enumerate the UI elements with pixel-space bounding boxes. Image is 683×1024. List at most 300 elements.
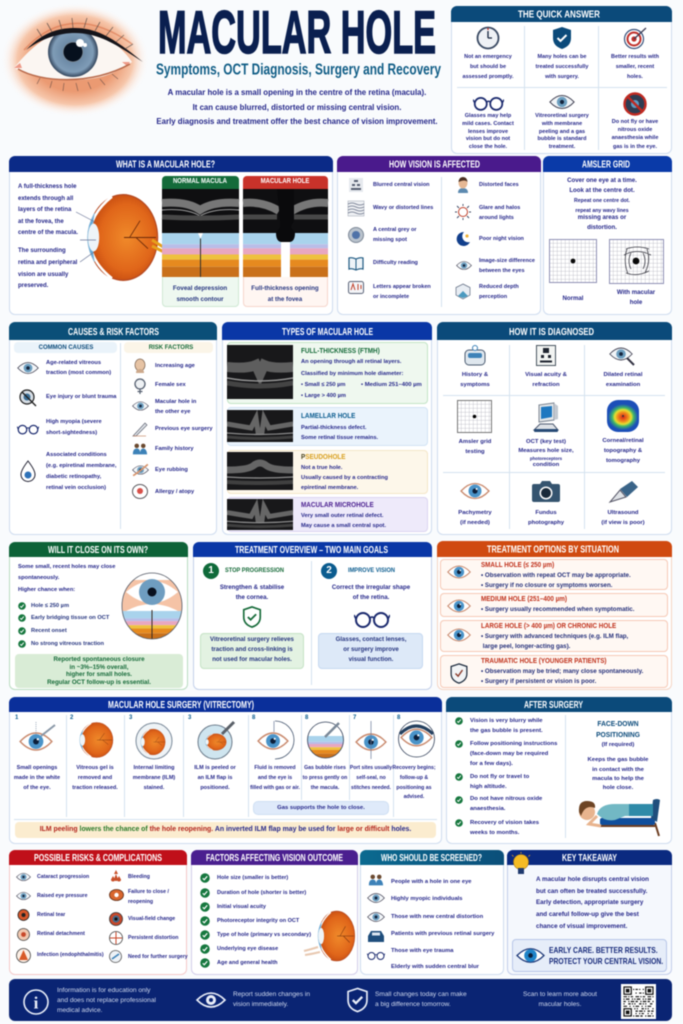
icon: tear drop bbox=[20, 460, 36, 482]
title: small hole: SMALL HOLE (≤ 250 µm) bbox=[481, 560, 554, 569]
text: step 4 bbox=[194, 764, 236, 794]
text: step 4: ILM is peeled or bbox=[194, 765, 236, 771]
text: glasses may help: Glasses may help bbox=[465, 113, 511, 119]
illustration: eye cross-section bbox=[76, 193, 163, 282]
text: do not fly: anaesthesia while bbox=[612, 135, 658, 141]
icon: distorted face bbox=[457, 176, 469, 194]
text: topography: tomography bbox=[606, 458, 640, 464]
text: pachymetry: Pachymetry bbox=[458, 510, 492, 516]
icon: light bulb bbox=[511, 852, 531, 878]
text: increasing age: Increasing age bbox=[155, 363, 195, 369]
text: stabilise: the cornea. bbox=[236, 594, 268, 601]
panel: after surgery bbox=[446, 697, 672, 844]
callout: ILM peeling note: ILM peeling lowers the chance of the hole reopening. An inverted ILM flap may be used for large or difficult holes. bbox=[40, 826, 411, 833]
text: recent onset: Recent onset bbox=[31, 628, 67, 634]
icon: check bbox=[455, 740, 463, 748]
image: OCT full-thickness bbox=[227, 345, 293, 399]
illustration: human eye bbox=[6, 7, 144, 113]
intro text: A macular hole is a small opening in the centre of the retina (macula). bbox=[168, 88, 426, 97]
icon: eye rubbing bbox=[132, 463, 149, 477]
illustration: eyeball bbox=[304, 909, 356, 965]
text: reduced depth: Reduced depth bbox=[479, 284, 519, 290]
text: nitrous oxide: Do not have nitrous oxide bbox=[470, 796, 542, 802]
text: image-size difference: between the eyes bbox=[479, 268, 525, 274]
card: traumatic hole bbox=[440, 655, 668, 688]
text: do not fly: gas is in the eye. bbox=[613, 144, 657, 150]
icon: glasses bbox=[17, 423, 39, 435]
text: irregular shape: Correct the irregular shape bbox=[332, 584, 410, 591]
text: OCT key test: OCT (key test) bbox=[526, 438, 566, 444]
text: retinal tear: Retinal tear bbox=[37, 912, 65, 918]
text: history: History & bbox=[462, 372, 488, 378]
text: full-thickness details: • Small ≤ 250 µm bbox=[301, 382, 345, 388]
text: full-thickness details bbox=[301, 357, 403, 402]
text: glasses may help bbox=[462, 112, 514, 150]
text: slogan: PROTECT YOUR CENTRAL VISION. bbox=[549, 956, 663, 966]
text: amsler instructions end: distortion. bbox=[587, 224, 617, 231]
label: normal macula: NORMAL MACULA bbox=[173, 178, 227, 185]
text: large hole details: large peel, longer-acting gas). bbox=[483, 643, 570, 650]
text: do not fly bbox=[611, 118, 659, 150]
text: blurred central vision: Blurred central vision bbox=[373, 182, 430, 188]
icon: family bbox=[132, 442, 148, 455]
icon: further surgery bbox=[109, 950, 122, 963]
text: initial acuity: Initial visual acuity bbox=[217, 904, 266, 910]
text: previous eye surgery: Previous eye surgery bbox=[155, 426, 213, 432]
text: treated successfully: with surgery. bbox=[545, 74, 579, 80]
text: recovery: weeks to months. bbox=[470, 830, 519, 836]
text: step 1: Small openings bbox=[17, 765, 57, 771]
text: photoreceptor condition: condition bbox=[533, 462, 559, 468]
text: glare and halos: Glare and halos bbox=[479, 205, 520, 211]
text: assess promptly: assessed promptly. bbox=[463, 74, 513, 80]
icon: moon bbox=[456, 231, 470, 247]
panel: causes and risk factors bbox=[9, 322, 217, 535]
image: OCT microhole bbox=[227, 499, 293, 530]
text: associated conditions bbox=[46, 450, 116, 494]
text: do not fly bbox=[470, 772, 529, 792]
badge: number 1: 1 bbox=[208, 565, 214, 576]
text: full-thickness details: • Large > 400 µm bbox=[301, 393, 346, 399]
icon: persistent distortion bbox=[109, 931, 123, 945]
step 1: 1 bbox=[15, 715, 18, 721]
icon: check bbox=[455, 819, 463, 827]
icon: eye chart bbox=[536, 345, 556, 366]
icon: check bbox=[18, 614, 26, 622]
title: lamellar: LAMELLAR HOLE bbox=[301, 411, 355, 420]
text: step 6: the macula. bbox=[311, 785, 339, 791]
icon: eye bbox=[447, 627, 471, 643]
heading: TYPES OF MACULAR HOLE bbox=[282, 327, 373, 338]
title: large hole: LARGE HOLE (> 400 µm) OR CHRONIC HOLE bbox=[481, 621, 616, 630]
icon: shield with check bbox=[449, 663, 469, 684]
text: step 7: self-seal, no bbox=[356, 775, 386, 781]
label: with macular hole: With macular bbox=[617, 289, 655, 296]
intro text: Early diagnosis and treatment offer the best chance of vision improvement. bbox=[156, 117, 438, 126]
text: step 6: to press gently on bbox=[303, 775, 347, 781]
text: keeps the bubble: Keeps the gas bubble bbox=[588, 757, 648, 763]
text: medium size: • Medium 251–400 µm bbox=[361, 382, 422, 388]
text: step 5: Fluid is removed bbox=[254, 765, 296, 771]
text: stabilise bbox=[220, 583, 284, 603]
text: surrounding retina bbox=[18, 246, 78, 290]
icon: step 8 recovery bbox=[398, 720, 435, 758]
chart: distorted amsler grid bbox=[608, 238, 665, 285]
text: amsler instructions: Cover one eye at a time. bbox=[567, 177, 637, 184]
text: fundus photography bbox=[528, 508, 564, 528]
heading bbox=[437, 541, 672, 557]
text: step 5 bbox=[250, 764, 300, 794]
icon: step 1 eye bbox=[18, 722, 60, 754]
heading bbox=[222, 322, 432, 340]
text: vitreoretinal surgery: with membrane bbox=[542, 121, 582, 127]
text: eye injury: Eye injury or blunt trauma bbox=[46, 394, 116, 400]
caption: full-thickness opening: Full-thickness opening bbox=[251, 284, 319, 292]
heading bbox=[507, 850, 672, 865]
text: lamellar details: Some retinal tissue remains. bbox=[301, 435, 378, 441]
text: image-size difference: Image-size difference bbox=[479, 258, 535, 264]
text: central grey spot: A central grey or bbox=[373, 227, 417, 233]
text: full-thickness definition: extends through all bbox=[18, 196, 73, 202]
text: step 8: follow-up & bbox=[400, 775, 428, 781]
text: positioning: for a few days). bbox=[470, 761, 513, 767]
icon: infection bbox=[16, 948, 31, 963]
panel: will it close on its own: higher for small holes. bbox=[66, 671, 132, 678]
chart: normal amsler grid bbox=[548, 238, 598, 284]
panel: treatment overview: Glasses, contact lenses, bbox=[336, 636, 406, 643]
icon: increasing age bbox=[134, 359, 146, 373]
icon: green shield bbox=[242, 606, 262, 628]
heading bbox=[9, 156, 333, 172]
text: ultrasound: (if view is poor) bbox=[601, 520, 645, 526]
footer band bbox=[9, 979, 672, 1021]
panel: factors affecting vision outcome bbox=[191, 850, 358, 975]
card: lamellar bbox=[227, 407, 428, 446]
title: pseudohole: PSEUDOHOLE bbox=[301, 452, 346, 461]
text: new distortion: Those with new central distortion bbox=[391, 914, 483, 920]
text: takeaway: chance of visual improvement. bbox=[536, 923, 627, 930]
text: vitreoretinal surgery: Vitreoretinal surgery bbox=[535, 113, 589, 119]
text: irregular shape bbox=[332, 583, 410, 603]
text: hole type: Type of hole (primary vs secondary) bbox=[217, 932, 311, 938]
icon: examined eye bbox=[548, 94, 576, 110]
text: lamellar details bbox=[301, 423, 378, 443]
icon: visual-field change bbox=[109, 912, 123, 926]
icon: step 4 peel bbox=[198, 720, 238, 760]
text: hole in other eye: the other eye bbox=[155, 409, 190, 415]
text: do not fly: high altitude. bbox=[470, 784, 507, 790]
text: takeaway: but can often be treated successfully. bbox=[536, 888, 647, 895]
text: nitrous oxide bbox=[470, 794, 542, 814]
text: dilated exam: Dilated retinal bbox=[604, 372, 642, 378]
text: scan: macular holes. bbox=[539, 1001, 581, 1008]
text: education: medical advice. bbox=[57, 1007, 102, 1014]
icon: myopic eye bbox=[367, 892, 385, 904]
badge: number 1 bbox=[203, 563, 219, 579]
text: step 1 bbox=[14, 764, 60, 794]
intro text: It can cause blurred, distorted or missing central vision. bbox=[193, 102, 401, 112]
text: microhole details: Very small outer retinal defect. bbox=[301, 513, 384, 519]
text: scan bbox=[523, 990, 597, 1010]
icon: depth cube bbox=[454, 283, 472, 300]
callout: early care bbox=[512, 939, 667, 972]
text: microhole details: May cause a small central spot. bbox=[301, 523, 386, 529]
icon: eye bbox=[447, 564, 471, 580]
icon: check bbox=[200, 930, 210, 940]
icon: failure to close bbox=[109, 889, 124, 901]
icon: image-size eye bbox=[456, 260, 472, 270]
icon: female sign bbox=[134, 378, 146, 394]
text: sudden blur: Elderly with sudden central blur bbox=[391, 964, 479, 970]
text: image-size difference bbox=[478, 257, 536, 274]
text: high myopia: High myopia (severe bbox=[46, 418, 102, 424]
text: full-thickness definition: centre of the macula. bbox=[18, 230, 78, 236]
text: fundus photography: Fundus bbox=[535, 510, 557, 516]
text: ultrasound: Ultrasound bbox=[607, 510, 639, 516]
text: intro bbox=[18, 562, 115, 584]
text: hole size: Hole size (smaller is better) bbox=[217, 875, 288, 881]
panel: treatment overview bbox=[193, 542, 432, 690]
panel: treatment options by situation bbox=[437, 541, 672, 690]
text: amsler test: Amsler grid bbox=[459, 439, 491, 445]
text: large hole details bbox=[481, 632, 628, 652]
text: step 6 bbox=[303, 764, 347, 794]
heading bbox=[9, 850, 187, 865]
text: visual-field change: Visual-field change bbox=[128, 916, 175, 922]
text: slogan: EARLY CARE. BETTER RESULTS. bbox=[549, 946, 658, 954]
text: takeaway: A macular hole disrupts central vision bbox=[536, 876, 649, 883]
label: with macular hole bbox=[616, 288, 656, 306]
heading: face-down positioning bbox=[596, 718, 640, 740]
text: microhole details bbox=[301, 511, 386, 531]
text: takeaway bbox=[536, 874, 649, 932]
heading: THE QUICK ANSWER bbox=[518, 10, 601, 20]
text: amsler instructions: Repeat one centre dot. bbox=[574, 198, 630, 204]
step 8: 8 bbox=[397, 715, 400, 721]
text: duration: Duration of hole (shorter is better) bbox=[217, 890, 306, 896]
title: stop progression: STOP PROGRESSION bbox=[225, 567, 284, 574]
text: report changes: Report sudden changes in bbox=[233, 991, 310, 998]
text: stabilise: Strengthen & stabilise bbox=[220, 584, 284, 591]
text: keeps the bubble bbox=[588, 756, 648, 793]
text: positioning: Follow positioning instructions bbox=[470, 741, 557, 747]
text: photoreceptor condition: photoreceptors bbox=[530, 456, 562, 461]
text: step 2: Vitreous gel is bbox=[76, 765, 114, 771]
text: pseudohole details: Not a true hole. bbox=[301, 465, 342, 471]
text: associated conditions: retinal vein occlusion) bbox=[46, 484, 106, 490]
text: full-thickness definition: at the fovea, the bbox=[18, 219, 64, 225]
text: pseudohole details: Usually caused by a contracting bbox=[301, 475, 388, 481]
text: do not fly: nitrous oxide bbox=[618, 127, 652, 133]
text: surrounding retina: retina and peripheral bbox=[18, 260, 77, 266]
text: takeaway: and careful follow-up give the best bbox=[536, 911, 639, 918]
illustration: eye over retina layers bbox=[120, 572, 184, 640]
text: amsler instructions bbox=[566, 176, 637, 214]
icon: bleeding bbox=[110, 870, 122, 883]
text: letters broken: Letters appear broken bbox=[373, 284, 431, 290]
icon: retinal tear bbox=[16, 909, 31, 921]
heading: WILL IT CLOSE ON ITS OWN? bbox=[48, 545, 148, 556]
text: full-thickness details: Classified by minimum hole diameter: bbox=[301, 371, 403, 377]
step 3: 3 bbox=[129, 715, 132, 721]
icon: broken glasses bbox=[367, 949, 385, 962]
text: vitreoretinal surgery bbox=[534, 112, 590, 150]
illustration: face-down person bbox=[575, 798, 663, 838]
badge: number 2 bbox=[321, 563, 337, 579]
text: report changes: vision immediately. bbox=[233, 1001, 288, 1008]
caption: foveal depression bbox=[172, 284, 228, 302]
text: step 2: removed and bbox=[78, 775, 112, 781]
step 6: 8 bbox=[305, 715, 308, 721]
text: higher chance: Higher chance when: bbox=[18, 587, 75, 593]
text: step 5: filled with gas or air. bbox=[250, 785, 300, 791]
heading bbox=[191, 850, 358, 865]
heading: face-down positioning: FACE-DOWN bbox=[597, 718, 639, 728]
text: small hole details: • Surgery if no closure or symptoms worsen. bbox=[481, 582, 612, 589]
text: surrounding retina: vision are usually bbox=[18, 272, 68, 278]
heading bbox=[9, 322, 217, 340]
heading: TREATMENT OPTIONS BY SITUATION bbox=[487, 544, 619, 556]
intro text bbox=[156, 88, 438, 126]
text: amsler instructions end bbox=[577, 214, 627, 231]
text: assess promptly: but should be bbox=[470, 64, 506, 70]
text: further surgery: Need for further surgery bbox=[128, 954, 188, 960]
panel: how it is diagnosed bbox=[437, 322, 672, 535]
card: pseudohole bbox=[227, 450, 428, 494]
text: amsler test: testing bbox=[465, 449, 485, 455]
text: traumatic hole details: • Observation may be tried; many close spontaneously. bbox=[481, 668, 643, 675]
heading: AFTER SURGERY bbox=[524, 700, 583, 711]
chart: topography map bbox=[607, 400, 639, 432]
text: allergy: Allergy / atopy bbox=[155, 489, 194, 495]
text: myopic: Highly myopic individuals bbox=[391, 896, 463, 902]
text: lamellar details: Partial-thickness defect. bbox=[301, 425, 366, 431]
icon: glasses bbox=[354, 610, 390, 628]
text: glasses may help: close the hole. bbox=[469, 144, 507, 150]
icon: info: i bbox=[34, 994, 39, 1012]
heading bbox=[9, 542, 188, 557]
heading: common causes bbox=[14, 342, 117, 353]
label: macular hole: MACULAR HOLE bbox=[261, 178, 309, 185]
text: cataract: Cataract progression bbox=[37, 874, 89, 880]
text: treated successfully: Many holes can be bbox=[538, 54, 586, 60]
callout: vitreoretinal surgery bbox=[200, 633, 304, 669]
icon: dilated exam bbox=[609, 346, 635, 366]
icon: check bbox=[455, 796, 463, 804]
card: normal macula bbox=[162, 176, 239, 307]
icon: eye bbox=[196, 991, 226, 1009]
badge: number 2: 2 bbox=[326, 565, 332, 576]
text: pachymetry: (if needed) bbox=[460, 520, 490, 526]
text: step 3: membrane (ILM) bbox=[133, 775, 175, 781]
caption: full-thickness opening: at the fovea bbox=[268, 296, 302, 302]
text: vitreous traction bbox=[46, 358, 111, 379]
callout: ILM peeling note bbox=[15, 822, 436, 838]
icon: check bbox=[200, 873, 210, 883]
text: difficulty reading: Difficulty reading bbox=[373, 260, 418, 266]
icon: step 7 eye bbox=[354, 721, 388, 759]
text: full-thickness definition bbox=[18, 182, 78, 236]
text: recovery: Recovery of vision takes bbox=[470, 820, 539, 826]
text: reduced depth bbox=[478, 283, 520, 300]
callout: glasses and lenses bbox=[318, 633, 423, 669]
text: hole in other eye bbox=[155, 397, 196, 417]
heading bbox=[360, 850, 504, 865]
text: traumatic hole details: • Surgery if persistent or vision is poor. bbox=[481, 678, 596, 685]
text: vitreous traction: Age-related vitreous bbox=[46, 360, 101, 366]
panel: treatment overview: visual function. bbox=[349, 656, 393, 663]
text: photoreceptor condition bbox=[530, 456, 562, 469]
text: infection: Infection (endophthalmitis) bbox=[37, 952, 104, 958]
title: full-thickness: FULL-THICKNESS (FTMH) bbox=[301, 346, 380, 355]
icon: eye bbox=[447, 598, 471, 614]
icon: info bbox=[23, 989, 49, 1015]
icon: step 6 gas bubble bbox=[306, 720, 345, 760]
card: full-thickness bbox=[227, 342, 428, 404]
text: small hole details bbox=[481, 571, 631, 590]
text: education: Information is for education only bbox=[57, 987, 150, 994]
text: step 8: positioning as bbox=[396, 785, 432, 791]
heading bbox=[437, 322, 672, 340]
text: full-thickness definition: layers of the retina bbox=[18, 207, 71, 213]
text: vitreoretinal surgery: bubble is standard bbox=[538, 136, 586, 142]
text: do not fly: Do not fly or have bbox=[612, 119, 658, 125]
heading bbox=[9, 697, 442, 712]
heading bbox=[543, 156, 672, 172]
text: glasses may help: lenses improve bbox=[468, 129, 508, 135]
step 4: 3 bbox=[188, 715, 191, 721]
text: associated conditions: diabetic retinopathy, bbox=[46, 474, 101, 480]
card: small hole bbox=[440, 559, 668, 590]
text: vitreoretinal surgery: peeling and a gas bbox=[539, 129, 585, 135]
panel: will it close on its own: in ~3%–15% overall, bbox=[69, 664, 128, 671]
subtitle: Symptoms, OCT Diagnosis, Surgery and Recovery bbox=[156, 62, 441, 78]
text: small changes: a big difference tomorrow. bbox=[375, 1001, 451, 1008]
text: failure to close bbox=[128, 888, 169, 907]
panel: possible risks and complications bbox=[9, 850, 187, 975]
text: step 7: stitches needed. bbox=[351, 785, 391, 791]
icon: broken letters bbox=[347, 280, 365, 295]
title: improve vision: IMPROVE VISION bbox=[348, 567, 395, 574]
panel: treatment overview: traction and cross-linking is bbox=[211, 646, 293, 653]
text: scan: Scan to learn more about bbox=[523, 991, 597, 998]
text: takeaway: Early detection, appropriate surgery bbox=[536, 899, 643, 906]
panel: key takeaway bbox=[507, 850, 672, 975]
icon: check bbox=[18, 640, 26, 648]
text: treated successfully bbox=[535, 53, 589, 80]
icon: distortion eye bbox=[367, 911, 385, 923]
text: better results: Better results with bbox=[611, 54, 659, 60]
QR code bbox=[621, 984, 656, 1019]
text: reduced depth: perception bbox=[479, 294, 507, 300]
label: with macular hole: hole bbox=[630, 299, 642, 306]
text: no traction: No strong vitreous traction bbox=[31, 641, 104, 647]
heading bbox=[451, 6, 672, 22]
text: vitreous traction: traction (most common) bbox=[46, 370, 111, 376]
heading: face-down positioning: POSITIONING bbox=[596, 730, 640, 738]
icon: eye pressure bbox=[16, 891, 31, 901]
text: persistent distortion: Persistent distortion bbox=[128, 935, 178, 941]
text: ultrasound bbox=[601, 508, 645, 528]
text: full-thickness details: An opening through all retinal layers. bbox=[301, 359, 402, 365]
text: blurry vision: the gas bubble is present. bbox=[470, 728, 543, 734]
icon: missing spot bbox=[347, 226, 365, 244]
text: positioning bbox=[470, 739, 557, 769]
text: medium hole details: • Surgery usually recommended when symptomatic. bbox=[481, 606, 634, 613]
icon: check bbox=[200, 902, 210, 912]
text: high myopia: short-sightedness) bbox=[46, 430, 97, 436]
icon: target bbox=[623, 27, 647, 50]
